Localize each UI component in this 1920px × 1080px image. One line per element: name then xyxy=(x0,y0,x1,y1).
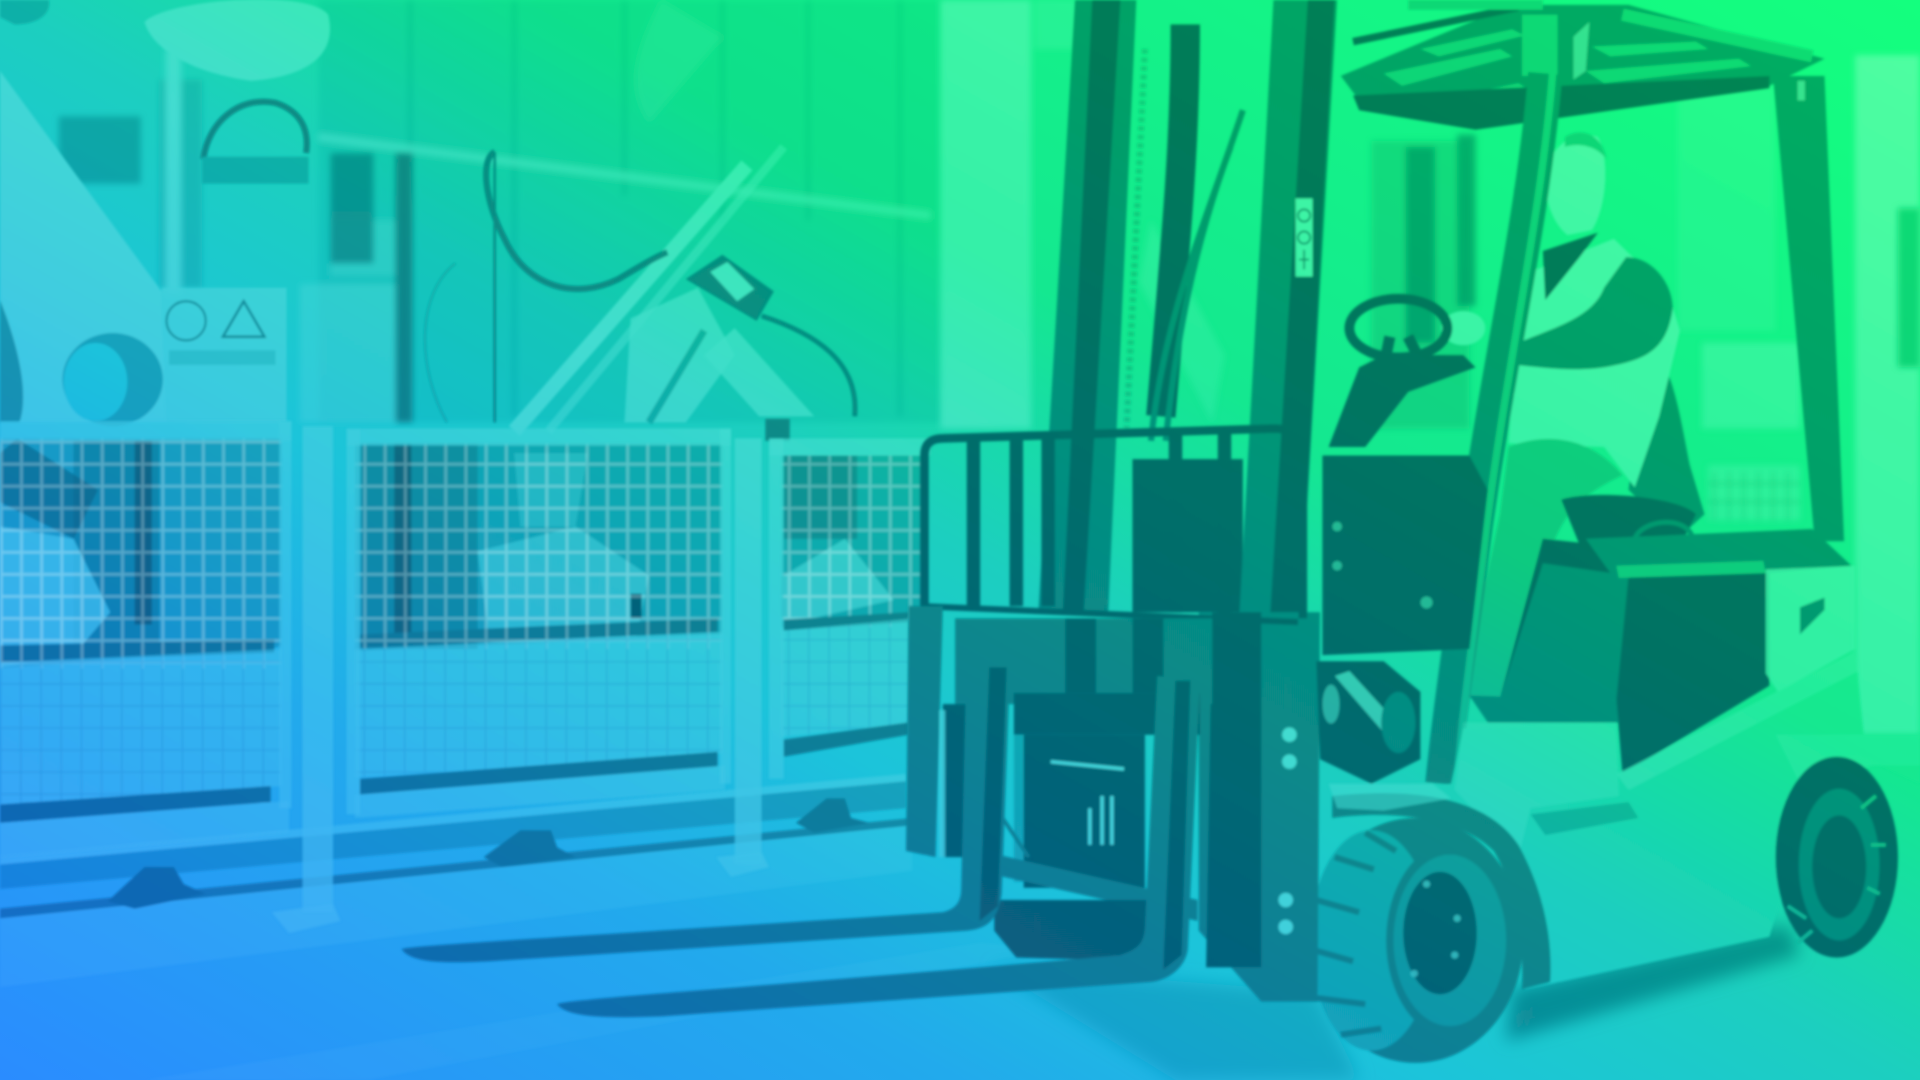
forklift xyxy=(402,0,1920,1063)
fence post 2 xyxy=(716,438,769,877)
work light xyxy=(1522,15,1558,76)
mast chain xyxy=(1127,49,1145,429)
window and racking seen behind the cab xyxy=(1139,86,1920,520)
rear wheel xyxy=(1776,757,1898,958)
driver jeans xyxy=(1469,439,1622,698)
driver neck and sleeve xyxy=(1543,233,1598,300)
steering wheel xyxy=(1329,299,1476,447)
welding robot with cable xyxy=(425,147,855,441)
front fender arch xyxy=(1332,793,1551,989)
icon: robot arm joint hole xyxy=(62,333,163,426)
fork left xyxy=(402,661,1010,962)
fork right xyxy=(557,676,1200,1017)
driver xyxy=(1441,132,1704,698)
floor and rails xyxy=(0,774,1053,1080)
rail bracket left xyxy=(108,867,206,909)
fence post 1 xyxy=(272,426,340,933)
safety sign panel xyxy=(162,288,287,422)
mast warning sticker xyxy=(1296,198,1313,277)
mast left rail xyxy=(1038,0,1136,612)
front guard post xyxy=(1442,73,1545,784)
entry step xyxy=(1455,696,1638,857)
load backrest xyxy=(921,429,1303,622)
mast lower section xyxy=(1199,612,1320,1002)
battery case xyxy=(1500,539,1769,774)
front wheel xyxy=(1308,818,1523,1063)
rail bracket middle xyxy=(484,830,576,867)
rail bracket right xyxy=(796,798,869,833)
battery hood xyxy=(1586,529,1851,578)
dashboard box xyxy=(1322,456,1488,655)
driver head xyxy=(1545,135,1605,235)
floor shadow under forklift xyxy=(992,924,1800,1080)
rear guard post xyxy=(1773,76,1844,541)
bolts on mast xyxy=(1282,727,1297,742)
driver vest xyxy=(1509,239,1680,487)
counterweight body xyxy=(1335,651,1920,989)
fence panel left xyxy=(0,421,291,857)
hood handle xyxy=(1635,522,1692,539)
welding head xyxy=(624,288,735,422)
light concrete pillars xyxy=(940,0,1920,735)
safety fence xyxy=(0,421,931,933)
driver seat back xyxy=(1629,349,1704,539)
tilt cylinder xyxy=(1316,661,1420,784)
overhead guard xyxy=(1341,0,1824,130)
rear compartment door xyxy=(1766,566,1855,692)
driver hand xyxy=(1441,311,1485,345)
fork carriage xyxy=(906,606,1212,960)
seat cushion xyxy=(1561,495,1696,545)
robot arm xyxy=(0,0,330,426)
fence panel right xyxy=(769,438,931,779)
factory back wall xyxy=(59,0,943,422)
mast right rail xyxy=(1237,0,1337,661)
fence panel middle xyxy=(347,429,731,818)
